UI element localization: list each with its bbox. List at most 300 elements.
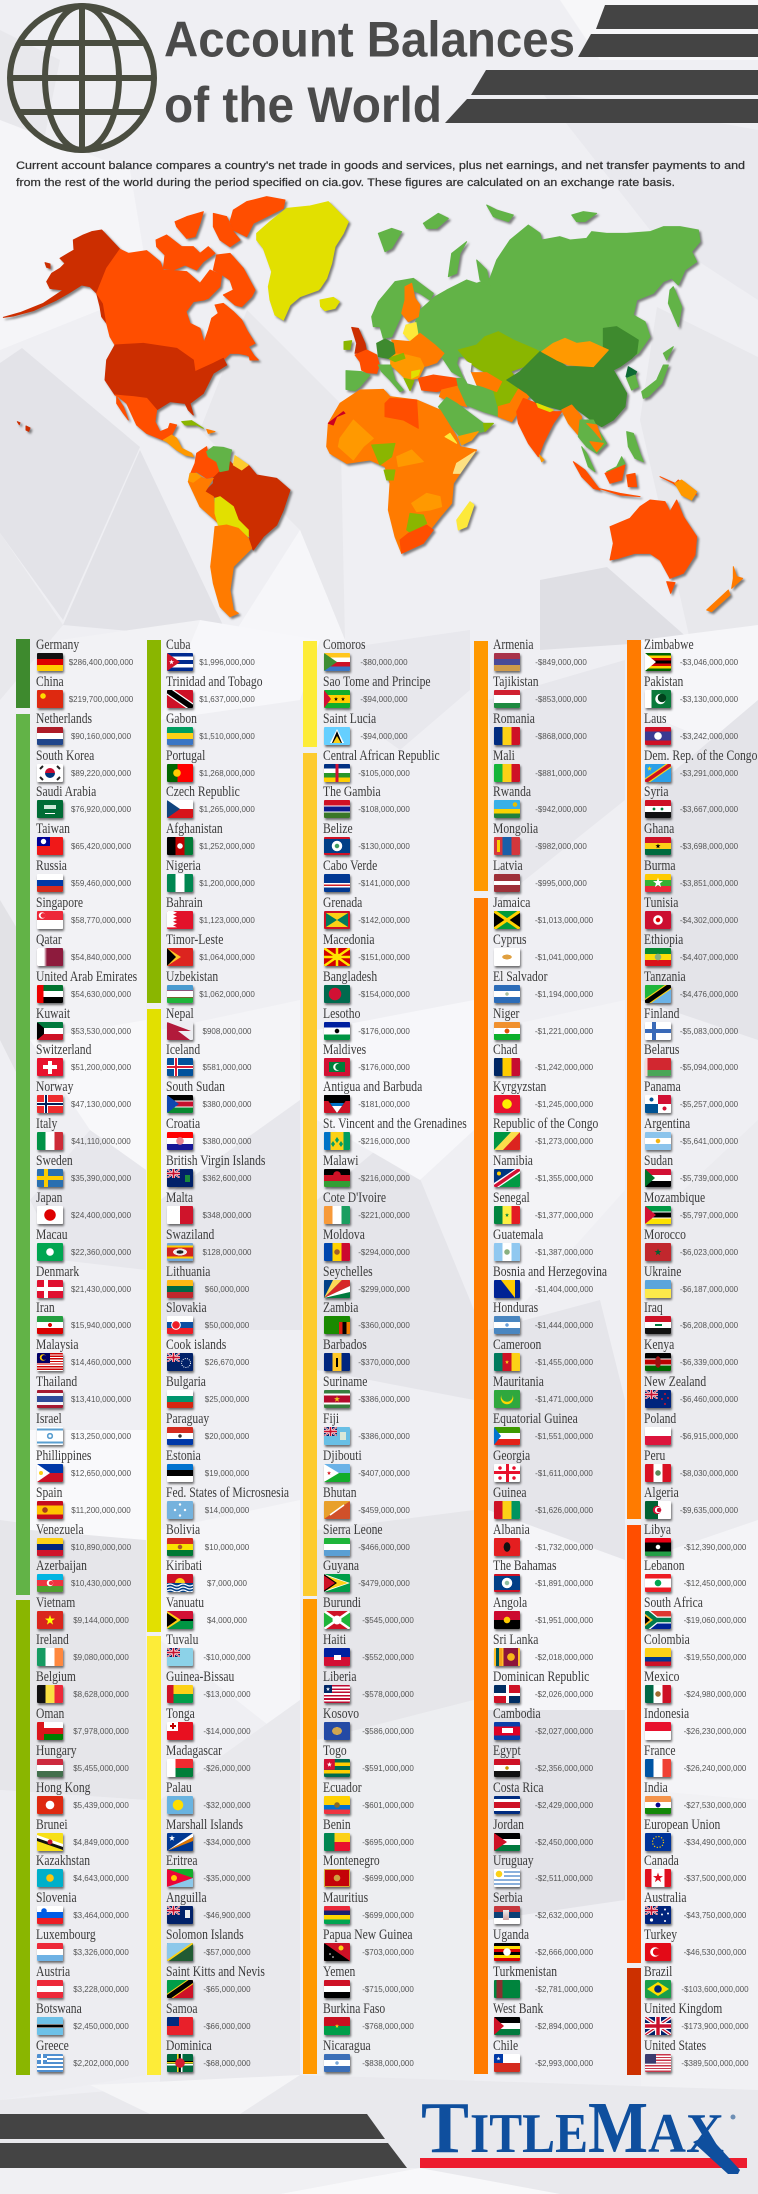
row: Mongolia: [494, 821, 624, 858]
map: South America: [188, 447, 290, 617]
row: European Union: [645, 1816, 757, 1853]
row: Afghanistan: [167, 821, 302, 858]
row: Portugal: [167, 748, 302, 784]
row: Czech Republic: $1,265,000,000: [199, 805, 255, 814]
row: Grenada: -$142,000,000: [358, 916, 410, 925]
row: Israel: [36, 1411, 131, 1448]
row: Macau: Macau: [36, 1227, 68, 1243]
bar: higher deficit tier column 4: [474, 898, 488, 2074]
row: Anguilla: [167, 1890, 302, 1927]
row: Bahrain: $1,123,000,000: [199, 916, 255, 925]
row: Brunei: [36, 1816, 129, 1854]
row: Central African Republic: -$105,000,000: [358, 769, 410, 778]
row: Armenia: [494, 637, 624, 674]
row: Luxembourg: $3,326,000,000: [73, 1948, 129, 1957]
row: Bosnia and Herzegovina: [494, 1264, 624, 1300]
row: Zimbabwe: [645, 637, 757, 674]
row: Burma: [645, 858, 757, 895]
row: United States: United States: [644, 2038, 706, 2054]
row: Chad: -$1,242,000,000: [535, 1063, 593, 1072]
row: Romania: [494, 711, 624, 748]
row: Jordan: -$2,450,000,000: [535, 1838, 593, 1846]
row: Greece: $2,202,000,000: [73, 2059, 129, 2068]
header stripes: [445, 5, 758, 123]
row: Chad: [494, 1042, 624, 1079]
row: Ireland: $9,080,000,000: [73, 1653, 129, 1662]
row: Gabon: $1,510,000,000: [199, 732, 255, 741]
row: Burkina Faso: Burkina Faso: [323, 2001, 385, 2017]
row: Bangladesh: -$154,000,000: [358, 990, 410, 999]
row: Laus: -$3,242,000,000: [680, 732, 738, 741]
row: Central African Republic: [324, 748, 472, 784]
row: Iran: $15,940,000,000: [71, 1321, 131, 1330]
row: Mozambique: [645, 1190, 757, 1227]
row: Colombia: -$19,550,000,000: [684, 1653, 746, 1662]
row: Morocco: -$6,023,000,000: [680, 1248, 738, 1257]
row: Belize: Belize: [323, 821, 353, 837]
row: Indonesia: [645, 1706, 757, 1743]
row: Singapore: [36, 895, 131, 932]
map: Europe: [344, 283, 444, 392]
row: Dominica: [167, 2038, 302, 2075]
row: Ethiopia: -$4,407,000,000: [680, 953, 738, 962]
row: Phillippines: $12,650,000,000: [71, 1469, 131, 1478]
row: Germany: $286,400,000,000: [69, 658, 133, 667]
row: Luxembourg: Luxembourg: [36, 1927, 96, 1943]
row: Hungary: $5,455,000,000: [73, 1764, 129, 1773]
row: Sweden: Sweden: [36, 1153, 73, 1169]
row: Montenegro: -$699,000,000: [362, 1874, 414, 1883]
row: Albania: Albania: [493, 1522, 530, 1538]
row: Serbia: Serbia: [493, 1890, 523, 1906]
row: Suriname: Suriname: [323, 1374, 367, 1390]
row: South Korea: $89,220,000,000: [71, 769, 131, 778]
row: Egypt: -$2,356,000,000: [535, 1764, 593, 1773]
row: British Virgin Islands: British Virgin Islands: [166, 1153, 265, 1169]
row: Saint Lucia: -$94,000,000: [360, 732, 408, 741]
row: Tanzania: [645, 969, 757, 1006]
row: Paraguay: Paraguay: [166, 1411, 209, 1427]
row: Kiribati: [167, 1558, 302, 1595]
row: Seychelles: -$299,000,000: [358, 1285, 410, 1294]
logo: TitleMax: ITLE: [470, 2103, 588, 2165]
row: British Virgin Islands: [167, 1153, 302, 1190]
world map: [2, 196, 746, 620]
row: Brunei: $4,849,000,000: [73, 1838, 129, 1846]
row: Russia: [36, 858, 131, 896]
row: Estonia: $19,000,000: [205, 1469, 249, 1478]
row: Vanuatu: Vanuatu: [166, 1595, 204, 1611]
row: Iceland: $581,000,000: [203, 1063, 251, 1072]
row: Kenya: -$6,339,000,000: [680, 1358, 738, 1367]
row: Tanzania: -$4,476,000,000: [680, 990, 738, 999]
row: Paraguay: [167, 1411, 302, 1448]
row: Libya: -$12,390,000,000: [684, 1543, 746, 1552]
row: Laus: Laus: [644, 711, 667, 727]
row: Antigua and Barbuda: Antigua and Barbuda: [323, 1079, 422, 1095]
row: Vietnam: Vietnam: [36, 1595, 75, 1611]
row: Samoa: Samoa: [166, 2001, 198, 2017]
row: Azerbaijan: Azerbaijan: [36, 1558, 87, 1574]
row: Macedonia: [324, 932, 472, 969]
row: Burkina Faso: [324, 2001, 472, 2038]
row: Malta: Malta: [166, 1190, 193, 1206]
header: [7, 3, 758, 189]
row: Kenya: Kenya: [644, 1337, 674, 1353]
row: Mali: [494, 748, 624, 784]
row: West Bank: [494, 2001, 624, 2038]
logo: TitleMax: AX: [648, 2103, 724, 2165]
row: Bulgaria: Bulgaria: [166, 1374, 206, 1390]
row: Anguilla: -$46,900,000: [203, 1911, 251, 1920]
row: Tonga: Tonga: [166, 1706, 195, 1722]
row: Kazakhstan: Kazakhstan: [36, 1853, 90, 1869]
row: Slovakia: Slovakia: [166, 1300, 207, 1316]
row: Equatorial Guinea: -$1,551,000,000: [535, 1432, 593, 1441]
row: St. Vincent and the Grenadines: [324, 1116, 472, 1153]
row: Colombia: Colombia: [644, 1632, 690, 1648]
row: Bosnia and Herzegovina: -$1,404,000,000: [535, 1285, 593, 1294]
row: Kyrgyzstan: [494, 1079, 624, 1116]
row: Canada: Canada: [644, 1853, 679, 1869]
row: Slovakia: [167, 1300, 302, 1337]
row: Solomon Islands: [167, 1927, 302, 1964]
row: St. Vincent and the Grenadines: St. Vincent and the Grenadines: [323, 1116, 467, 1132]
row: Timor-Leste: $1,064,000,000: [199, 953, 255, 962]
row: Palau: Palau: [166, 1780, 192, 1796]
row: Cyprus: [494, 932, 624, 969]
row: Lebanon: Lebanon: [644, 1558, 685, 1574]
row: Ecuador: -$601,000,000: [362, 1801, 414, 1810]
row: Sweden: [36, 1153, 131, 1190]
row: Guinea: -$1,626,000,000: [535, 1506, 593, 1515]
row: Lesotho: [324, 1006, 472, 1042]
row: Oman: Oman: [36, 1706, 64, 1722]
row: Yemen: [324, 1964, 472, 2001]
row: Malaysia: $14,460,000,000: [71, 1358, 131, 1367]
row: Belgium: [36, 1669, 129, 1706]
row: Bolivia: [167, 1522, 302, 1558]
row: Kiribati: Kiribati: [166, 1558, 202, 1574]
row: Panama: -$5,257,000,000: [680, 1100, 738, 1109]
row: Paraguay: $20,000,000: [205, 1432, 249, 1441]
row: Angola: Angola: [493, 1595, 527, 1611]
row: Maldives: [324, 1042, 472, 1079]
row: Italy: [36, 1116, 131, 1154]
row: Trinidad and Tobago: $1,637,000,000: [199, 695, 255, 704]
row: Georgia: -$1,611,000,000: [535, 1469, 593, 1478]
row: Turkmenistan: [494, 1964, 624, 2001]
row: Colombia: [645, 1632, 757, 1669]
row: Malawi: -$216,000,000: [358, 1174, 410, 1183]
row: Oman: $7,978,000,000: [73, 1727, 129, 1736]
row: Kyrgyzstan: Kyrgyzstan: [493, 1079, 546, 1095]
row: New Zealand: New Zealand: [644, 1374, 706, 1390]
row: Nicaragua: Nicaragua: [323, 2038, 371, 2054]
row: Niger: Niger: [493, 1006, 519, 1022]
row: Saudi Arabia: $76,920,000,000: [71, 805, 131, 814]
row: Belgium: $8,628,000,000: [73, 1690, 129, 1699]
row: Tajikistan: [494, 674, 624, 711]
map: Middle East: [418, 375, 500, 445]
row: Netherlands: [36, 711, 131, 748]
row: Madagascar: [167, 1743, 302, 1780]
row: Thailand: $13,410,000,000: [71, 1395, 131, 1404]
row: Fiji: Fiji: [323, 1411, 339, 1427]
row: Malta: [167, 1190, 302, 1227]
row: Kuwait: Kuwait: [36, 1006, 70, 1022]
row: Argentina: -$5,641,000,000: [680, 1137, 738, 1146]
row: Kuwait: $53,530,000,000: [71, 1027, 131, 1036]
intro text: Current account balance compares a country's net trade in goods and services, plus net earnings, and net transfer payments to and: [16, 160, 745, 172]
row: Zimbabwe: Zimbabwe: [644, 637, 694, 653]
row: Cyprus: -$1,041,000,000: [535, 953, 593, 962]
row: Hong Kong: [36, 1780, 129, 1818]
row: Barbados: [324, 1337, 472, 1374]
row: Macau: $22,360,000,000: [71, 1248, 131, 1257]
row: Russia: $59,460,000,000: [71, 879, 131, 888]
row: Taiwan: Taiwan: [36, 821, 70, 837]
row: Armenia: Armenia: [493, 637, 534, 653]
row: Mexico: Mexico: [644, 1669, 679, 1685]
row: The Gambia: [324, 784, 472, 821]
row: Iraq: -$6,208,000,000: [680, 1321, 738, 1330]
row: Netherlands: $90,160,000,000: [71, 732, 131, 741]
row: Romania: -$868,000,000: [535, 732, 587, 741]
row: Bolivia: Bolivia: [166, 1522, 200, 1538]
map: USA: [105, 343, 227, 415]
bar: moderate surplus tier column 2: [147, 640, 161, 1003]
row: Azerbaijan: $10,430,000,000: [71, 1579, 131, 1588]
row: Antigua and Barbuda: -$181,000,000: [358, 1100, 410, 1109]
map: Greenland: [257, 202, 348, 320]
row: South Africa: [645, 1595, 757, 1632]
row: Eritrea: Eritrea: [166, 1853, 198, 1869]
row: Nigeria: Nigeria: [166, 858, 201, 874]
row: Brazil: [645, 1964, 757, 2001]
row: Afghanistan: $1,252,000,000: [199, 842, 255, 851]
row: Portugal: $1,268,000,000: [199, 769, 255, 778]
row: Canada: [645, 1853, 757, 1890]
row: Tunisia: -$4,302,000,000: [680, 916, 738, 925]
row: West Bank: -$2,894,000,000: [535, 2022, 593, 2031]
row: Mongolia: Mongolia: [493, 821, 538, 837]
row: Bangladesh: [324, 969, 472, 1006]
row: Maldives: Maldives: [323, 1042, 366, 1058]
row: Malawi: [324, 1153, 472, 1190]
row: Pakistan: -$3,130,000,000: [680, 695, 738, 704]
row: Niger: [494, 1006, 624, 1042]
row: Cameroon: -$1,455,000,000: [535, 1358, 593, 1367]
row: The Bahamas: [494, 1558, 624, 1595]
panel: country list column 1: [36, 637, 137, 2076]
row: Guinea: Guinea: [493, 1485, 526, 1501]
row: Mauritius: Mauritius: [323, 1890, 368, 1906]
row: Finland: [645, 1006, 757, 1042]
row: Morocco: [645, 1227, 757, 1264]
row: Hong Kong: Hong Kong: [36, 1780, 90, 1796]
row: Luxembourg: [36, 1927, 129, 1964]
row: Equatorial Guinea: Equatorial Guinea: [493, 1411, 578, 1427]
row: Vietnam: [36, 1595, 129, 1632]
row: Belize: -$130,000,000: [358, 842, 410, 851]
row: Cote D'Ivoire: -$221,000,000: [358, 1211, 410, 1220]
row: Saint Lucia: Saint Lucia: [323, 711, 376, 727]
map: Canada: [97, 197, 285, 372]
row: Ireland: Ireland: [36, 1632, 69, 1648]
row: Dominican Republic: [494, 1669, 624, 1706]
row: Portugal: Portugal: [166, 748, 205, 764]
row: Qatar: [36, 932, 131, 970]
row: Djibouti: Djibouti: [323, 1448, 362, 1464]
row: Togo: Togo: [323, 1743, 347, 1759]
row: Cameroon: Cameroon: [493, 1337, 541, 1353]
row: Benin: -$695,000,000: [362, 1838, 414, 1846]
row: Afghanistan: Afghanistan: [166, 821, 223, 837]
row: Bulgaria: [167, 1374, 302, 1411]
row: Bangladesh: Bangladesh: [323, 969, 377, 985]
row: British Virgin Islands: $362,600,000: [203, 1174, 251, 1183]
map: Australia and New Zealand: [610, 500, 743, 612]
row: Finland: -$5,083,000,000: [680, 1027, 738, 1036]
row: South Sudan: [167, 1079, 302, 1116]
row: Japan: Japan: [36, 1190, 62, 1206]
row: Cambodia: Cambodia: [493, 1706, 541, 1722]
row: Slovenia: [36, 1890, 129, 1928]
row: Saudi Arabia: [36, 784, 131, 822]
row: Ukraine: Ukraine: [644, 1264, 681, 1280]
row: Sri Lanka: -$2,018,000,000: [535, 1653, 593, 1662]
row: Israel: $13,250,000,000: [71, 1432, 131, 1441]
row: South Africa: -$19,060,000,000: [684, 1616, 746, 1625]
row: Comoros: -$80,000,000: [360, 658, 408, 667]
row: Mali: Mali: [493, 748, 515, 764]
row: Nicaragua: -$838,000,000: [362, 2059, 414, 2068]
row: Republic of the Congo: -$1,273,000,000: [535, 1137, 593, 1146]
row: Belgium: Belgium: [36, 1669, 76, 1685]
row: Morocco: Morocco: [644, 1227, 686, 1243]
row: Singapore: $58,770,000,000: [71, 916, 131, 925]
row: Bahrain: Bahrain: [166, 895, 203, 911]
row: Sierra Leone: Sierra Leone: [323, 1522, 383, 1538]
row: Saudi Arabia: Saudi Arabia: [36, 784, 96, 800]
row: Phillippines: [36, 1448, 131, 1486]
row: China: $219,700,000,000: [69, 695, 133, 704]
row: Barbados: -$370,000,000: [358, 1358, 410, 1367]
row: Nicaragua: [324, 2038, 472, 2075]
row: Burundi: Burundi: [323, 1595, 361, 1611]
row: Uganda: Uganda: [493, 1927, 529, 1943]
row: Algeria: -$9,635,000,000: [680, 1506, 738, 1515]
row: Botswana: [37, 2001, 145, 2038]
row: Ethiopia: [645, 932, 757, 969]
row: Iraq: [645, 1300, 757, 1337]
bar: large deficit tier: [627, 1525, 641, 1963]
row: Macedonia: Macedonia: [323, 932, 375, 948]
row: Sierra Leone: -$466,000,000: [358, 1543, 410, 1552]
row: Thailand: [36, 1374, 131, 1412]
row: Denmark: [36, 1264, 131, 1302]
row: India: -$27,530,000,000: [684, 1801, 746, 1810]
row: Libya: Libya: [644, 1522, 671, 1538]
row: Angola: [494, 1595, 624, 1632]
row: Palau: -$32,000,000: [203, 1801, 251, 1810]
row: Maldives: -$176,000,000: [358, 1063, 410, 1072]
row: Sri Lanka: Sri Lanka: [493, 1632, 538, 1648]
row: Estonia: Estonia: [166, 1448, 201, 1464]
row: Papua New Guinea: Papua New Guinea: [323, 1927, 413, 1943]
row: Saint Kitts and Nevis: [167, 1964, 302, 2001]
row: Iraq: Iraq: [644, 1300, 663, 1316]
row: Venezuela: Venezuela: [36, 1522, 84, 1538]
row: Czech Republic: Czech Republic: [166, 784, 240, 800]
row: Russia: Russia: [36, 858, 67, 874]
row: Pakistan: Pakistan: [644, 674, 683, 690]
row: Cook islands: Cook islands: [166, 1337, 226, 1353]
row: Cambodia: [494, 1706, 624, 1743]
row: Denmark: $21,430,000,000: [71, 1285, 131, 1294]
row: Mozambique: -$5,797,000,000: [680, 1211, 738, 1220]
row: Syria: [645, 784, 757, 821]
row: Venezuela: [36, 1522, 131, 1560]
row: El Salvador: [494, 969, 624, 1006]
row: Vanuatu: $4,000,000: [207, 1616, 247, 1625]
panel: country list column 3: [324, 637, 472, 2075]
map: Mexico and Central America: [115, 395, 215, 457]
row: Tonga: -$14,000,000: [203, 1727, 251, 1736]
row: West Bank: West Bank: [493, 2001, 543, 2017]
row: Solomon Islands: Solomon Islands: [166, 1927, 244, 1943]
row: Uzbekistan: [167, 969, 302, 1006]
row: South Africa: South Africa: [644, 1595, 703, 1611]
row: New Zealand: -$6,460,000,000: [680, 1395, 738, 1404]
row: Croatia: Croatia: [166, 1116, 200, 1132]
row: Mauritius: [324, 1890, 472, 1927]
row: El Salvador: El Salvador: [493, 969, 547, 985]
row: Fed. States of Microsnesia: Fed. States of Microsnesia: [166, 1485, 289, 1501]
row: Trinidad and Tobago: [167, 674, 302, 711]
row: Turkey: -$46,530,000,000: [684, 1948, 746, 1957]
row: Togo: [324, 1743, 472, 1780]
row: Pakistan: [645, 674, 757, 711]
row: Egypt: Egypt: [493, 1743, 521, 1759]
row: Haiti: -$552,000,000: [362, 1653, 414, 1662]
row: Ukraine: [645, 1264, 757, 1300]
row: Nepal: $908,000,000: [203, 1027, 251, 1036]
row: Latvia: [494, 858, 624, 895]
bar: higher deficit tier column 5: [627, 640, 641, 1519]
row: Bahrain: [167, 895, 302, 932]
row: Chile: Chile: [493, 2038, 518, 2054]
row: Canada: -$37,500,000,000: [684, 1874, 746, 1883]
row: The Gambia: The Gambia: [323, 784, 381, 800]
row: Guinea-Bissau: Guinea-Bissau: [166, 1669, 234, 1685]
row: Poland: -$6,915,000,000: [680, 1432, 738, 1441]
row: Hungary: [36, 1743, 129, 1780]
row: Lesotho: -$176,000,000: [358, 1027, 410, 1036]
row: Tuvalu: [167, 1632, 302, 1669]
row: Mozambique: Mozambique: [644, 1190, 705, 1206]
row: Palau: [167, 1780, 302, 1816]
row: Serbia: [494, 1890, 624, 1927]
row: Honduras: [494, 1300, 624, 1337]
row: Chile: -$2,993,000,000: [535, 2059, 593, 2068]
row: Eritrea: [167, 1853, 302, 1890]
map: Africa: [327, 389, 477, 553]
row: Switzerland: Switzerland: [36, 1042, 91, 1058]
row: Argentina: [645, 1116, 757, 1153]
row: Namibia: -$1,355,000,000: [535, 1174, 593, 1183]
